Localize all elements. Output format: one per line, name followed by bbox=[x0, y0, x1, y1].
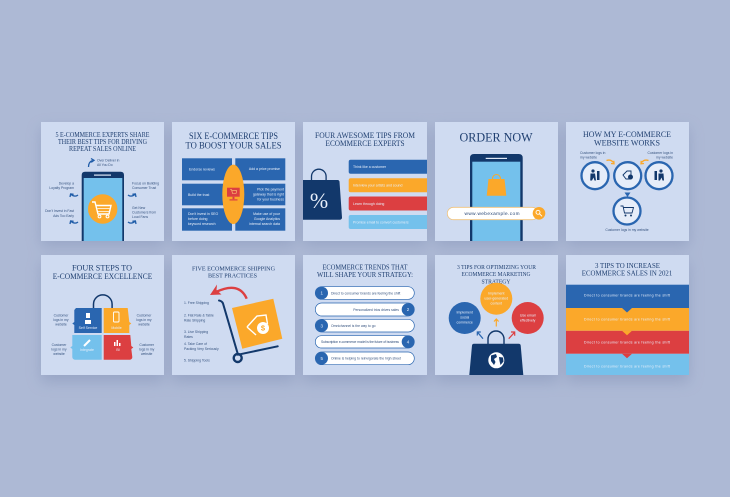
trend text: Personalized trios drives sales bbox=[353, 308, 399, 312]
tip box text: internal search data bbox=[249, 222, 280, 226]
bag with globe bbox=[469, 331, 523, 375]
number circles bbox=[315, 287, 414, 365]
heading: ECOMMERCE MARKETING bbox=[462, 271, 531, 278]
heading bbox=[583, 130, 671, 147]
panel: six tips bbox=[172, 122, 295, 241]
tip bars bbox=[349, 160, 427, 229]
step icons bbox=[590, 169, 664, 216]
tip circles: Implement bbox=[457, 310, 473, 314]
step labels: my website bbox=[580, 156, 597, 160]
heading: E-COMMERCE EXCELLENCE bbox=[53, 271, 152, 281]
side labels: Customer bbox=[54, 314, 69, 318]
numbers: 4 bbox=[407, 339, 410, 344]
heading: REPEAT SALES ONLINE bbox=[69, 145, 136, 153]
phone with cart bbox=[82, 172, 124, 241]
trend text: Subscription e-commerce model is the future of business bbox=[321, 340, 399, 344]
orange box with price tag: $ bbox=[261, 324, 266, 332]
step labels: my website bbox=[656, 156, 673, 160]
panel: four awesome tips bbox=[303, 122, 427, 241]
tip labels: Don't Invest in Fast bbox=[45, 209, 74, 213]
tip box text: Add a price promise bbox=[249, 167, 280, 171]
colour bands bbox=[566, 285, 689, 375]
side labels: logs in my bbox=[53, 318, 69, 322]
heading: ECOMMERCE SALES IN 2021 bbox=[582, 268, 672, 277]
shipping list: Rates bbox=[184, 335, 193, 339]
heading: 3 TIPS TO INCREASE bbox=[595, 261, 660, 270]
shipping list: 5. Shipping Tools bbox=[184, 358, 210, 362]
tip box text: Don't invest in SEO bbox=[188, 212, 219, 216]
panel: ecommerce trends bbox=[303, 255, 427, 375]
tip box text: keyword research bbox=[188, 222, 216, 226]
tip box text: gateway that is right bbox=[253, 192, 284, 196]
trend text: Online is helping to reinvigorate the high street bbox=[331, 356, 401, 360]
tip circles: Use email bbox=[520, 314, 536, 318]
panel: 5 experts tips bbox=[41, 122, 164, 241]
side labels: website bbox=[53, 352, 65, 356]
panel: four steps bbox=[41, 255, 164, 375]
trend pills bbox=[315, 287, 414, 365]
orange ellipse bbox=[222, 165, 244, 224]
tip circles: commerce bbox=[457, 320, 473, 324]
heading: WEBSITE WORKS bbox=[594, 138, 660, 147]
step labels: Customer logs in my website bbox=[605, 228, 649, 232]
shipping list: Packing Very Seriously bbox=[184, 347, 219, 351]
numbers bbox=[320, 291, 410, 361]
tip box text: Pick the payment bbox=[257, 188, 284, 192]
tip labels: Get New bbox=[132, 206, 146, 210]
tip bars: Interview your artists and sound bbox=[353, 184, 402, 188]
tip labels: Loyalty Program bbox=[49, 186, 74, 190]
heading: FIVE ECOMMERCE SHIPPING bbox=[192, 266, 275, 272]
heading: TO BOOST YOUR SALES bbox=[186, 142, 282, 152]
tip circles: effectively bbox=[520, 318, 536, 322]
heading: ORDER NOW bbox=[460, 129, 533, 144]
band text: Direct to consumer brands are feeling the shift bbox=[584, 340, 670, 344]
shipping list: 3. Live Shipping bbox=[184, 330, 208, 334]
heading: 3 TIPS FOR OPTIMIZING YOUR bbox=[457, 264, 537, 271]
side labels: website bbox=[141, 352, 153, 356]
heading: ECOMMERCE TRENDS THAT bbox=[322, 262, 408, 272]
search bar: www.webexample.com bbox=[464, 211, 520, 216]
tip labels: Ads Too Early bbox=[53, 214, 74, 218]
tip box text: Google Analytics bbox=[254, 217, 280, 221]
heading: THEIR BEST TIPS FOR DRIVING bbox=[58, 138, 147, 146]
tip box text: Build the trust bbox=[188, 193, 209, 197]
numbers: 1 bbox=[320, 291, 323, 296]
four tiles bbox=[70, 308, 133, 360]
tip labels: All You Do bbox=[97, 163, 113, 167]
trend text: Omnichannel is the way to go bbox=[331, 324, 376, 328]
tip circles: social bbox=[460, 316, 469, 320]
heading bbox=[192, 266, 275, 280]
panel: increase sales bbox=[566, 255, 689, 375]
icon: percent bag: % bbox=[310, 188, 328, 213]
side labels: logs in my bbox=[51, 348, 67, 352]
heading bbox=[457, 264, 537, 286]
hand truck bbox=[219, 300, 278, 362]
step labels bbox=[580, 151, 673, 232]
heading: FOUR STEPS TO bbox=[72, 262, 132, 272]
side labels: logs in my bbox=[139, 348, 155, 352]
heading: 5 E-COMMERCE EXPERTS SHARE bbox=[56, 131, 150, 139]
heading bbox=[186, 132, 282, 152]
four tiles: Integrate bbox=[80, 348, 94, 352]
side labels: logs in my bbox=[136, 318, 152, 322]
tip bars: Learn through doing bbox=[353, 202, 384, 206]
side labels: website bbox=[55, 322, 67, 326]
tip box text: before doing bbox=[188, 217, 208, 221]
side labels: website bbox=[138, 322, 150, 326]
tip box text: for your business bbox=[257, 198, 284, 202]
panel: marketing strategy tips bbox=[435, 255, 558, 375]
numbers: 3 bbox=[320, 323, 323, 328]
red arrow bbox=[210, 284, 247, 299]
shipping list: Rate Shipping bbox=[184, 318, 205, 322]
four tiles: Self Service bbox=[79, 326, 97, 330]
tip circles: Implement bbox=[488, 292, 504, 296]
step labels: Customer logs in bbox=[648, 151, 673, 155]
heading bbox=[317, 262, 413, 279]
heading: BEST PRACTICES bbox=[208, 272, 257, 280]
step labels: Customer logs in bbox=[580, 151, 606, 155]
tip labels: Focus on Building bbox=[132, 182, 159, 186]
tip circles bbox=[449, 283, 544, 334]
side labels bbox=[51, 314, 155, 356]
side labels: Customer bbox=[139, 343, 155, 347]
tip circles: user-generated bbox=[484, 296, 508, 300]
four tiles: Mobile bbox=[111, 326, 122, 330]
heading bbox=[53, 262, 152, 281]
numbers: 2 bbox=[407, 307, 410, 312]
tip labels: Loud Fans bbox=[132, 215, 148, 219]
side labels: Customer bbox=[52, 343, 67, 347]
tip labels bbox=[45, 158, 159, 219]
direction arrows bbox=[477, 319, 515, 339]
side labels: Customer bbox=[137, 314, 152, 318]
tip box text: Make use of your bbox=[253, 212, 281, 216]
shipping list: 2. Flat Rate & Table bbox=[184, 314, 214, 318]
icon: monitor bbox=[227, 188, 240, 200]
curved arrows bbox=[70, 158, 136, 224]
step circles bbox=[582, 162, 672, 224]
tip bars: Promise email to convert customers bbox=[353, 220, 409, 224]
panel: how my website works bbox=[566, 122, 689, 241]
orange arrows bbox=[606, 160, 648, 164]
tip labels: Over Deliver in bbox=[97, 158, 120, 162]
tip box text bbox=[188, 167, 284, 226]
heading: HOW MY E-COMMERCE bbox=[583, 130, 671, 139]
heading: FOUR AWESOME TIPS FROM bbox=[315, 131, 415, 140]
tip boxes bbox=[182, 158, 285, 231]
bag handle bbox=[94, 295, 112, 308]
heading: SIX E-COMMERCE TIPS bbox=[189, 132, 278, 142]
heading bbox=[315, 131, 415, 148]
four tiles: BI bbox=[116, 348, 120, 352]
icon: shopping bag bbox=[487, 174, 506, 196]
heading bbox=[582, 261, 672, 277]
shipping list: 1. Free Shipping bbox=[184, 301, 209, 305]
tip bars: Think like a customer bbox=[353, 165, 387, 169]
tip labels: Customers from bbox=[132, 210, 156, 214]
numbers: 5 bbox=[320, 356, 323, 361]
tip labels: Develop a bbox=[59, 182, 74, 186]
band text: Direct to consumer brands are feeling the shift bbox=[584, 364, 670, 368]
phone bbox=[470, 154, 523, 241]
tip circles: content bbox=[491, 302, 502, 306]
band text bbox=[584, 294, 670, 368]
tip box text: Endorse reviews bbox=[189, 168, 215, 172]
heading: ECOMMERCE EXPERTS bbox=[326, 139, 404, 148]
heading: WILL SHAPE YOUR STRATEGY: bbox=[317, 270, 413, 279]
panel: order now bbox=[435, 122, 558, 241]
band text: Direct to consumer brands are feeling the shift bbox=[584, 294, 670, 298]
shipping list: 4. Take Care of bbox=[184, 342, 207, 346]
tip labels: Consumer Trust bbox=[132, 186, 156, 190]
trend text bbox=[321, 291, 401, 360]
heading: STRATEGY bbox=[482, 278, 511, 286]
trend text: Direct to consumer brands are feeling the shift bbox=[331, 291, 400, 295]
shipping list bbox=[184, 301, 219, 362]
panel: shipping best practices bbox=[172, 255, 295, 375]
band text: Direct to consumer brands are feeling the shift bbox=[584, 318, 670, 322]
heading bbox=[56, 131, 150, 153]
